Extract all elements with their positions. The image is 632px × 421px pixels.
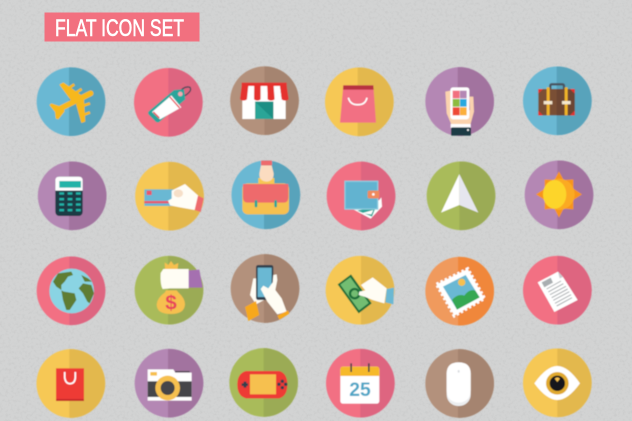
icon: eye — [523, 348, 592, 417]
icon: hand with cash — [326, 256, 394, 324]
icon: shopping bag — [325, 67, 394, 136]
icon: calendar — [326, 349, 395, 417]
icon: hands using smartphone — [231, 254, 299, 323]
icon: calculator — [38, 161, 107, 230]
icon: globe — [37, 256, 105, 325]
icon: price tag — [134, 68, 203, 137]
icon: suitcase — [523, 66, 592, 135]
icon: document — [523, 256, 592, 324]
icon: wallet — [327, 162, 395, 230]
icon: hand holding phone — [425, 67, 494, 136]
icon: hand with credit card — [135, 162, 204, 230]
icon: handheld game console — [229, 348, 298, 417]
icon: camera — [135, 349, 203, 417]
icon: sun — [525, 160, 593, 229]
icon: hand with money bag — [135, 256, 203, 324]
icon: postage stamp — [425, 257, 494, 325]
icon: airplane — [37, 67, 105, 136]
icon: briefcase with hand — [231, 160, 300, 229]
title banner: FLAT ICON SET — [55, 15, 184, 42]
icon: hand with money bag: $ — [165, 291, 177, 314]
icon: calendar: 25 — [349, 380, 371, 401]
icon: red gift bag — [36, 349, 105, 418]
icon: computer mouse — [425, 349, 494, 418]
icon: navigation arrow — [427, 161, 495, 230]
icon: storefront — [230, 66, 299, 135]
